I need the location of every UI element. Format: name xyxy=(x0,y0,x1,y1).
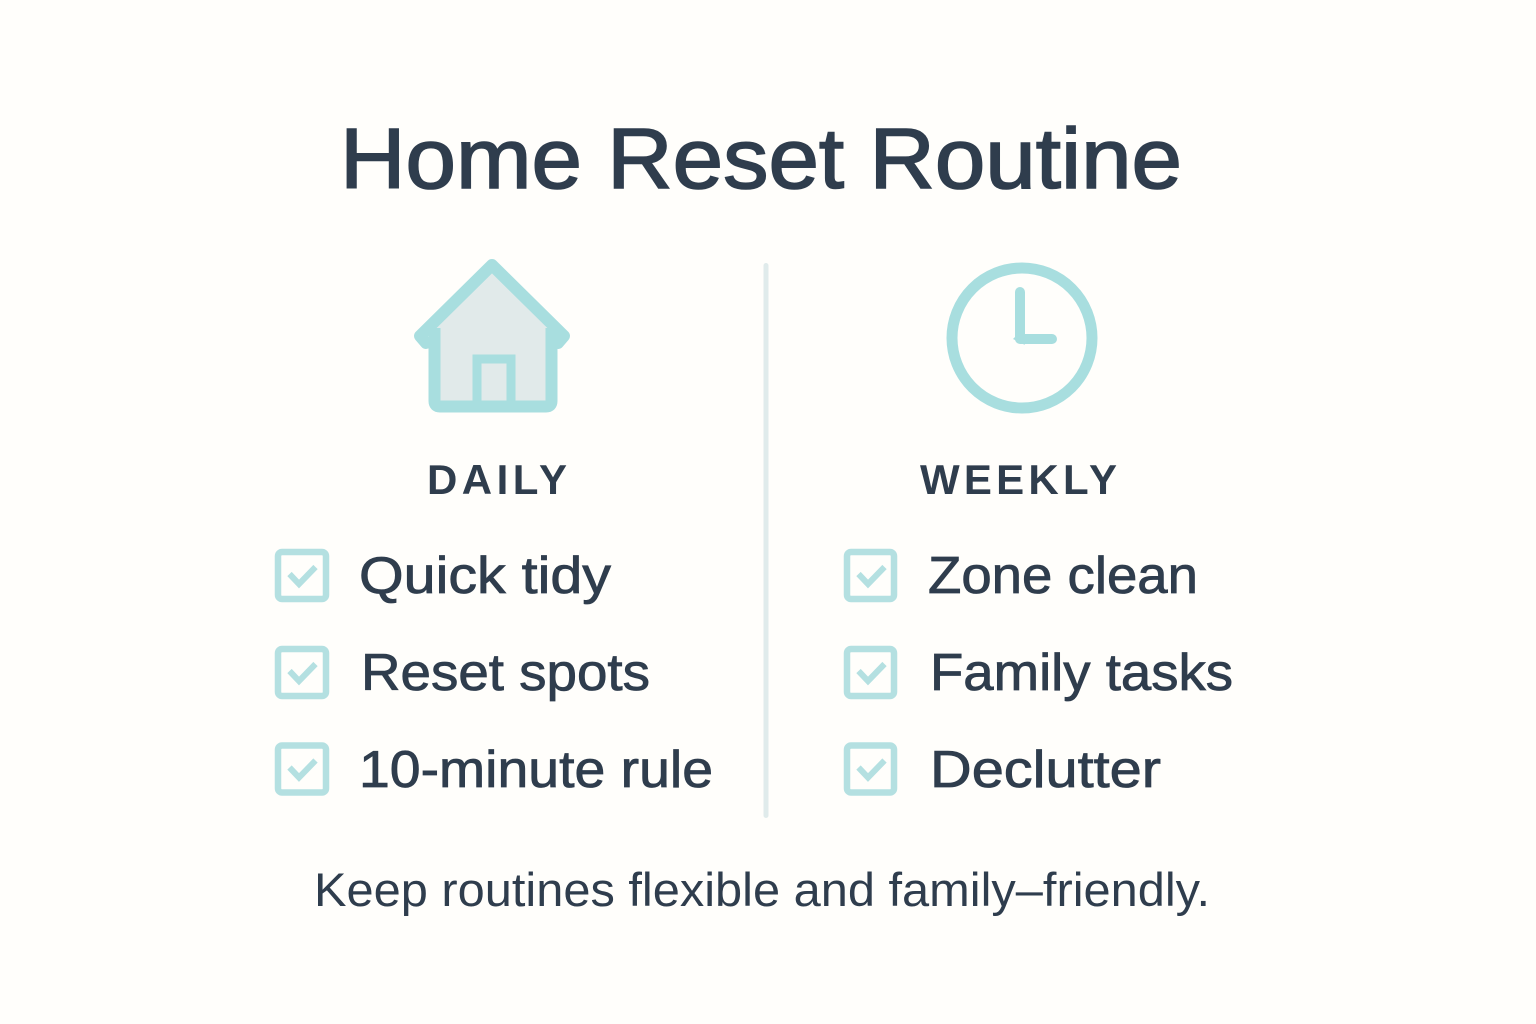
item: zone clean xyxy=(847,547,1198,605)
label: Quick tidy xyxy=(359,547,611,605)
checkbox xyxy=(278,649,326,696)
heading: daily: DAILY xyxy=(427,456,567,503)
footer note: Keep routines flexible and family–friendly. xyxy=(314,863,1210,916)
label: Reset spots xyxy=(361,644,650,702)
item: declutter xyxy=(847,741,1161,799)
label: 10-minute rule xyxy=(359,741,713,799)
label: Family tasks xyxy=(930,644,1233,702)
label: Declutter xyxy=(930,741,1161,799)
item: family tasks xyxy=(847,644,1233,702)
heading: weekly: WEEKLY xyxy=(920,456,1117,503)
panel: daily xyxy=(278,265,713,799)
checkbox xyxy=(847,552,894,599)
item: quick tidy xyxy=(278,547,611,605)
checkbox xyxy=(278,746,326,792)
label: Zone clean xyxy=(928,547,1198,605)
item: 10-minute rule xyxy=(278,741,713,799)
column divider xyxy=(764,263,768,818)
checkbox xyxy=(278,552,326,599)
title: Home Reset Routine xyxy=(340,112,1182,207)
panel: weekly xyxy=(847,268,1233,799)
checkbox xyxy=(847,746,894,792)
checkbox xyxy=(847,649,894,696)
icon: house xyxy=(420,265,564,407)
icon: clock xyxy=(952,268,1092,408)
item: reset spots xyxy=(278,644,650,702)
